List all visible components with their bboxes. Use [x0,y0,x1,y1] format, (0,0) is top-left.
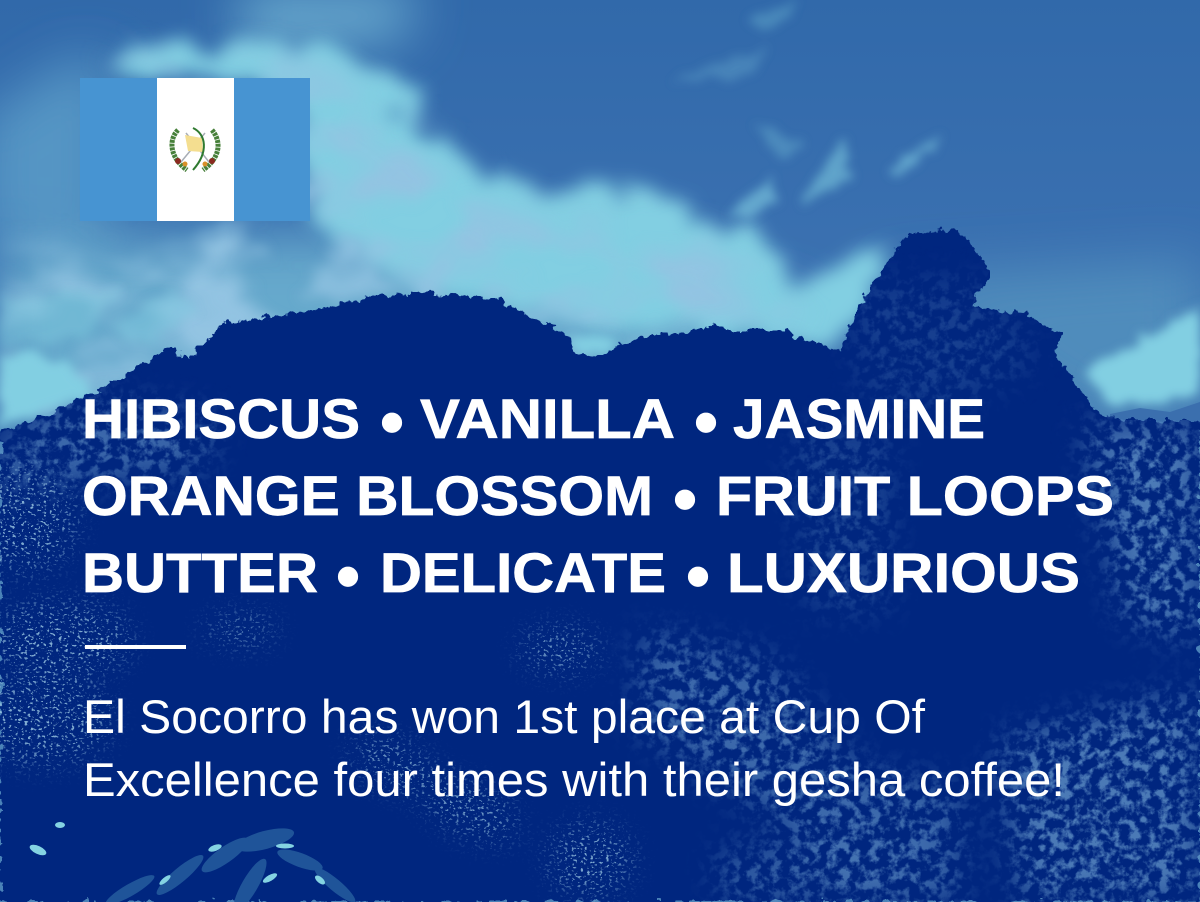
heading: flavour notes: HIBISCUS [82,387,360,450]
clouds [0,0,1200,430]
heading: flavour notes: • [686,538,710,614]
heading: flavour notes: ORANGE BLOSSOM [82,464,653,527]
heading: flavour notes: • [694,384,718,460]
heading: flavour notes: • [380,384,404,460]
heading: flavour notes: • [336,538,360,614]
foreground leaves [28,822,359,902]
heading: flavour notes: • [673,461,697,537]
flag stripes [80,78,310,221]
description text: Excellence four times with their gesha coffee! [83,753,1065,806]
heading: flavour notes: BUTTER [82,541,318,604]
heading: flavour notes: DELICATE [380,541,666,604]
heading: flavour notes: LUXURIOUS [727,541,1080,604]
forested hills [0,226,1200,902]
heading: flavour notes: JASMINE [733,387,985,450]
description text: El Socorro has won 1st place at Cup Of [83,690,926,743]
heading: flavour notes: VANILLA [420,387,675,450]
distant ridge [1110,402,1200,440]
heading: flavour notes [82,384,1114,614]
flag of Guatemala [80,78,310,221]
heading: flavour notes: FRUIT LOOPS [716,464,1114,527]
description text [83,690,1065,806]
icon: coat of arms [172,128,218,170]
